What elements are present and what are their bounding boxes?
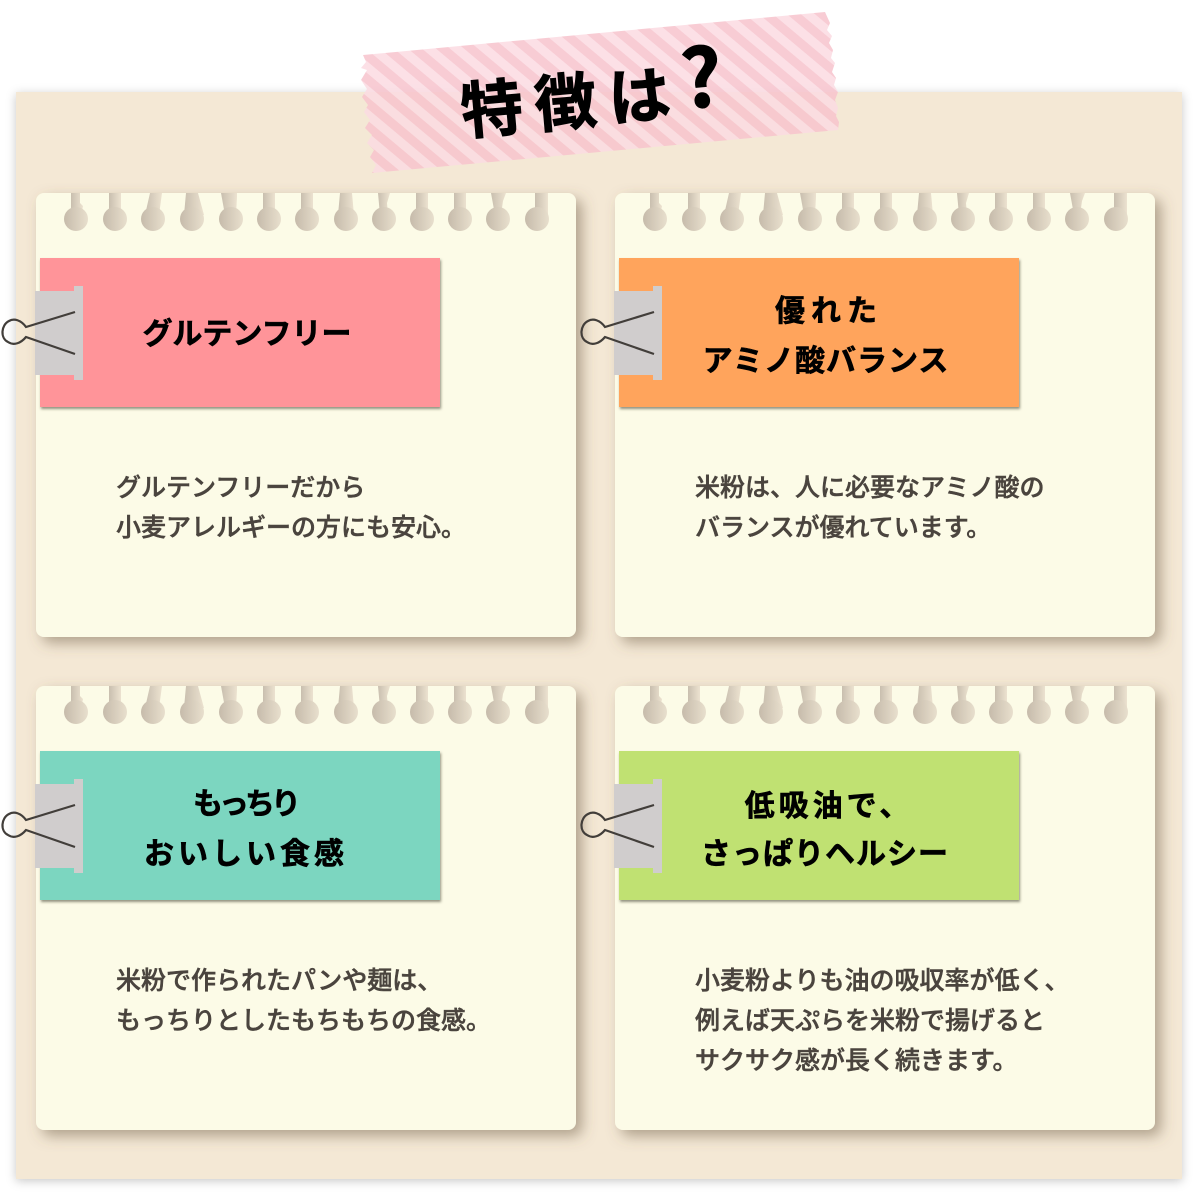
text block: バランスが優れています。 <box>695 514 991 542</box>
text block: サクサク感が長く続きます。 <box>695 1047 1018 1075</box>
label: amino acid heading: 優れた <box>775 286 883 330</box>
label: gluten free heading <box>40 258 440 407</box>
icon: binder clip <box>581 779 662 873</box>
card sheet <box>615 193 1155 637</box>
label: amino acid heading: アミノ酸バランス <box>703 336 949 380</box>
panel: chewy texture <box>2 686 576 1130</box>
panel: low oil absorption <box>581 686 1155 1130</box>
label: gluten free heading: グルテンフリー <box>142 309 352 353</box>
title text: 特徴は <box>457 43 686 152</box>
panel: gluten free <box>2 193 576 637</box>
text block: 小麦アレルギーの方にも安心。 <box>116 514 466 542</box>
title: masking tape banner <box>361 12 839 173</box>
label: amino acid heading <box>619 258 1019 407</box>
punched holes <box>64 686 549 724</box>
card sheet <box>36 686 576 1130</box>
icon: binder clip <box>581 286 662 380</box>
label: low oil heading: さっぱりヘルシー <box>701 829 949 873</box>
text block: 例えば天ぷらを米粉で揚げると <box>695 1007 1045 1035</box>
card sheet <box>615 686 1155 1130</box>
title text: ? <box>676 12 739 133</box>
panel: amino acid balance <box>581 193 1155 637</box>
punched holes <box>643 686 1128 724</box>
label: chewy heading: もっちり <box>193 779 297 823</box>
label: chewy heading <box>40 751 440 900</box>
text block: グルテンフリーだから <box>116 474 365 502</box>
text block: もっちりとしたもちもちの食感。 <box>116 1007 491 1035</box>
card sheet <box>36 193 576 637</box>
punched holes <box>643 193 1128 231</box>
icon: binder clip <box>2 286 83 380</box>
icon: binder clip <box>2 779 83 873</box>
text block: 小麦粉よりも油の吸収率が低く、 <box>695 967 1070 995</box>
label: low oil heading: 低吸油で、 <box>745 781 913 825</box>
label: low oil heading <box>619 751 1019 900</box>
text block: 米粉で作られたパンや麺は、 <box>116 967 442 995</box>
label: chewy heading: おいしい食感 <box>144 829 348 873</box>
punched holes <box>64 193 549 231</box>
tape <box>361 12 839 173</box>
text block: 米粉は、人に必要なアミノ酸の <box>695 474 1045 502</box>
